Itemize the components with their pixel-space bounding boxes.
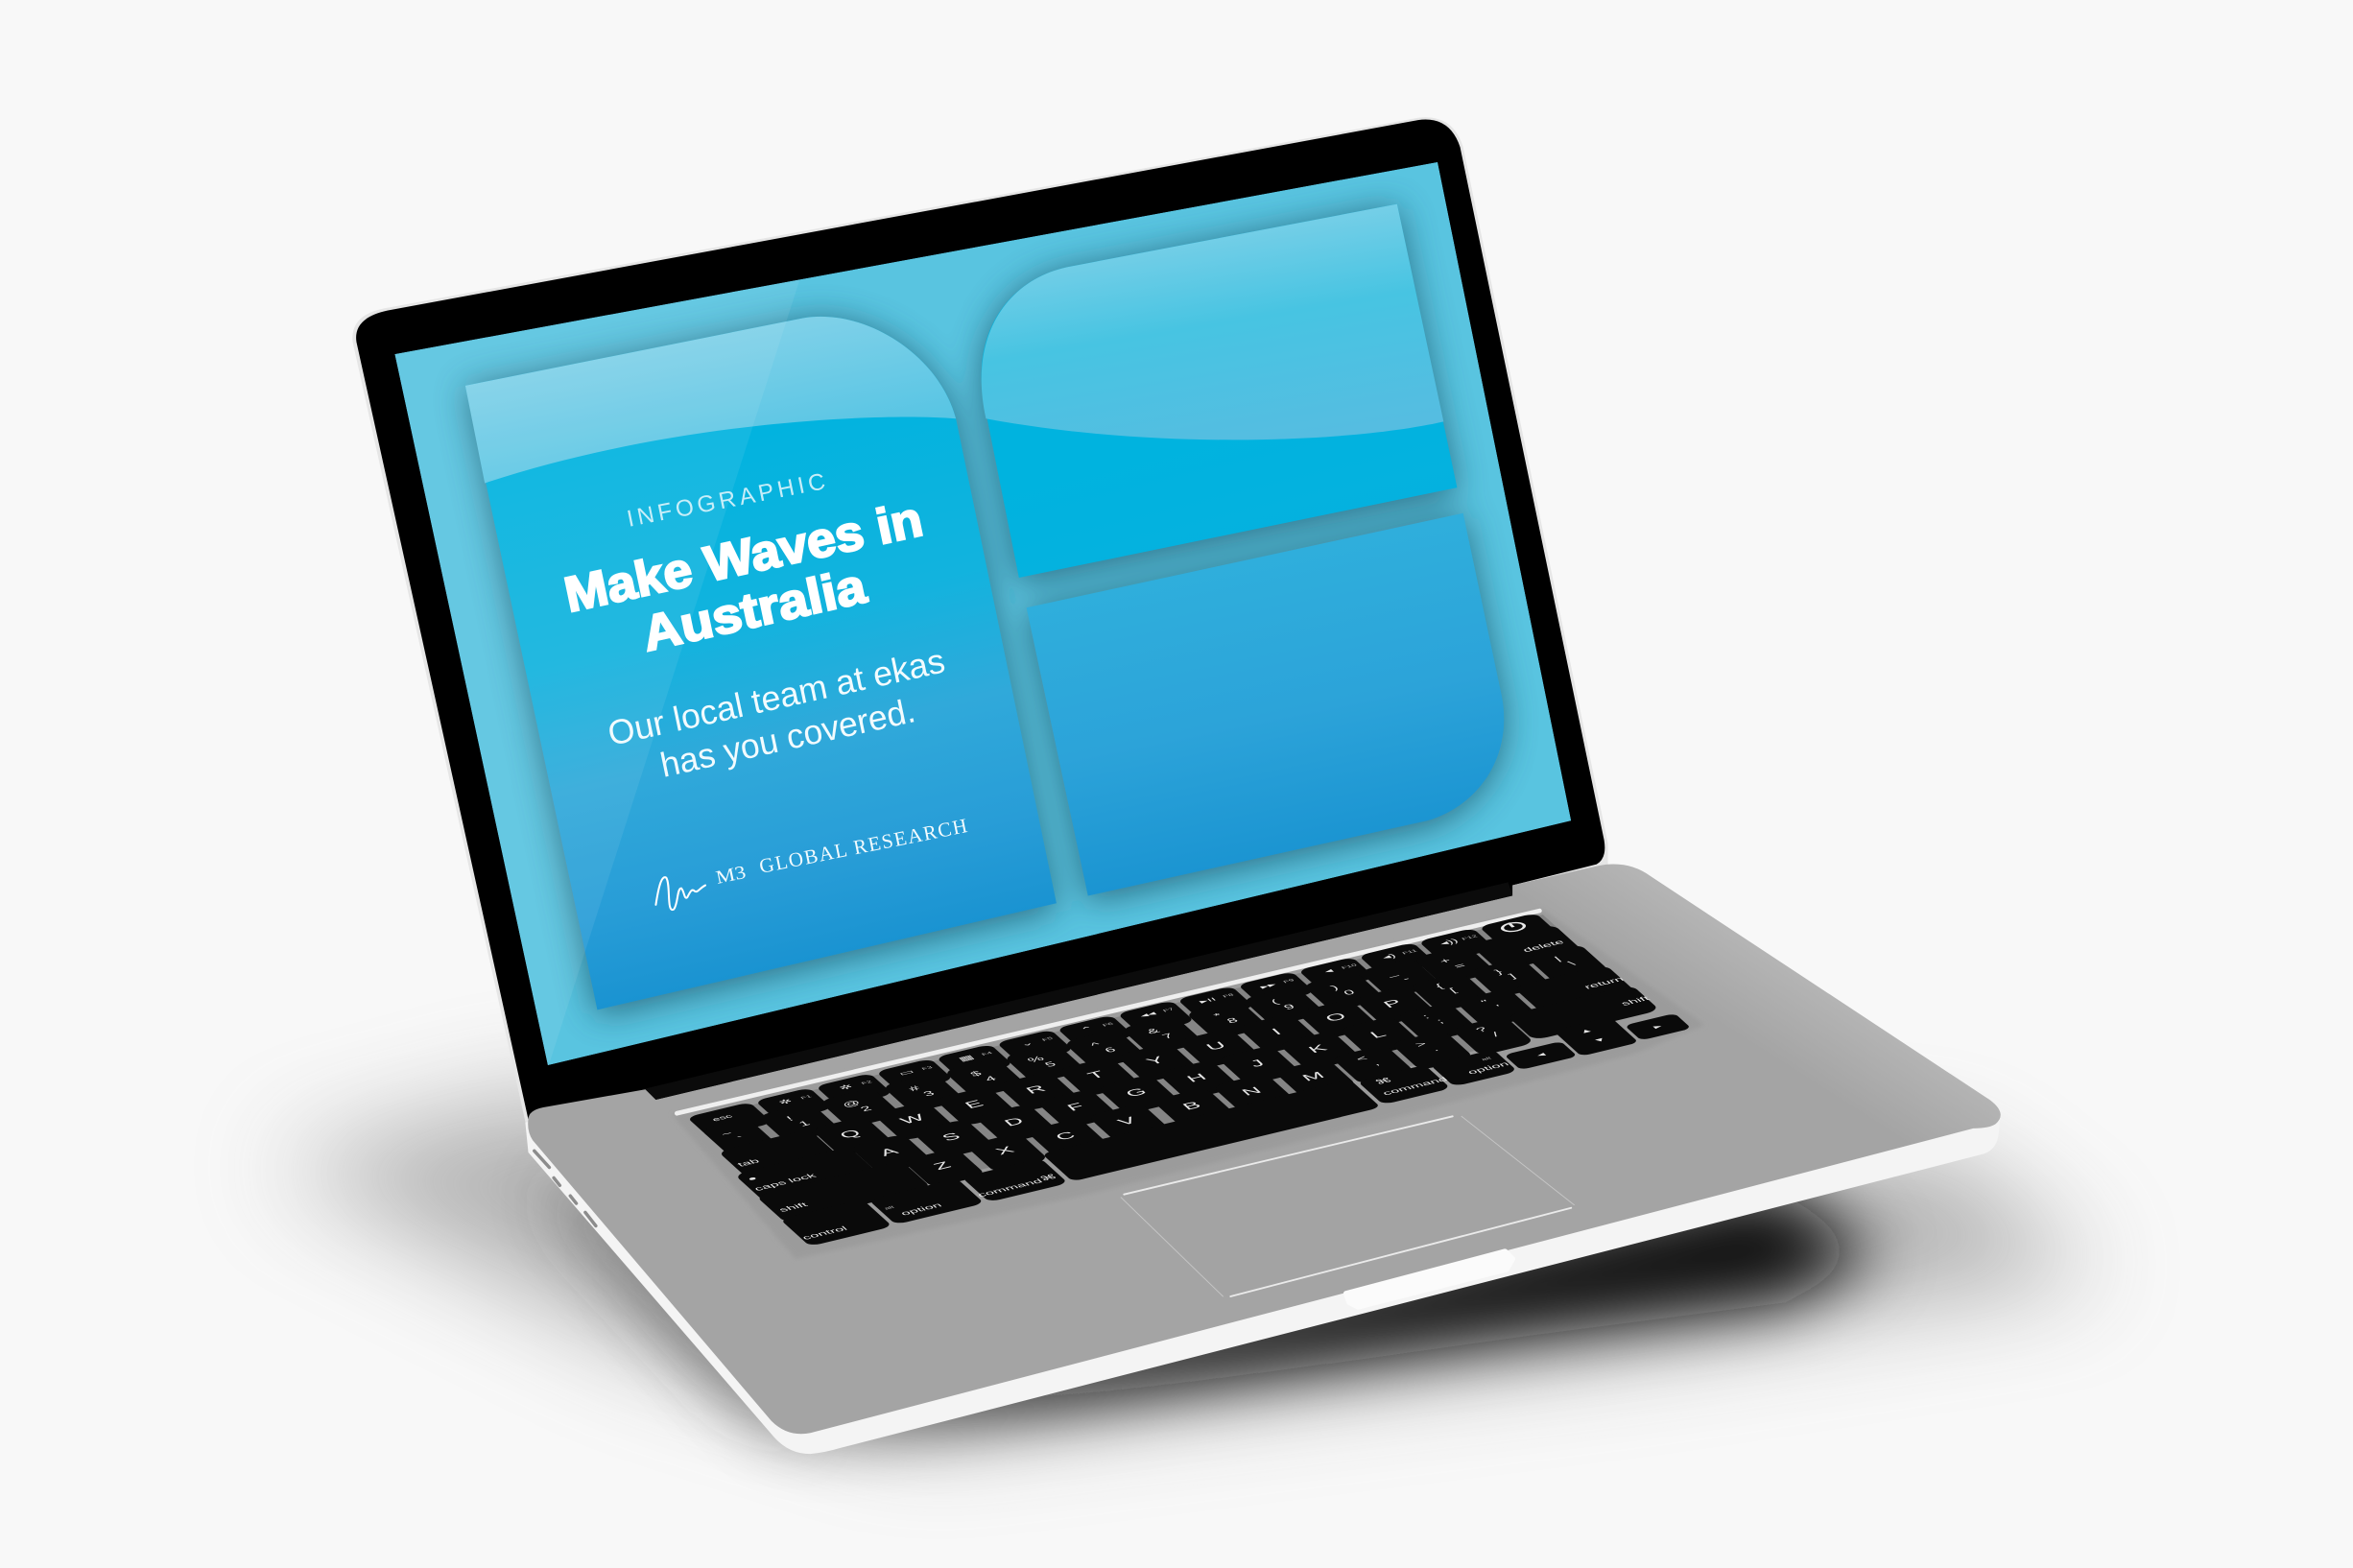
row: numbers: ^ [1088,1041,1104,1049]
row: numbers: 9 [1281,1003,1297,1011]
top right card wave sheen [982,204,1443,440]
front latch notch [1346,1251,1512,1307]
row: QWERTY: I [1269,1027,1285,1037]
logo: GLOBAL RESEARCH: GLOBAL RESEARCH [757,814,969,878]
row: modifiers and space bar: ⌘ [1372,1076,1394,1086]
panel: bottom right card [1027,513,1504,895]
row: function keys: F1 [799,1094,813,1100]
row: function keys: F12 [1461,935,1479,941]
title card body [465,317,1057,1010]
screen [394,162,1571,1068]
row: ASDF [734,964,1637,1201]
row: modifiers and space bar: option [898,1201,944,1217]
row: numbers: 6 [1103,1046,1119,1054]
row: function keys: ⌄ [1017,1039,1036,1048]
row: ZXCV: . [1430,1045,1440,1053]
row: function keys: F7 [1162,1008,1176,1012]
panel shadows [465,207,1504,1016]
lid silver edge [352,117,1608,1128]
row: modifiers and space bar: control [800,1224,849,1241]
row: numbers: 8 [1224,1016,1241,1025]
row: function keys: ▭ [896,1068,916,1077]
heading line 1: Make Waves in [559,490,927,623]
subheading line 1: Our local team at ekas [605,640,948,753]
logo: M3: M3 [714,863,748,889]
icon: M3 signature wave [655,877,705,910]
row: numbers: _ [1382,969,1400,978]
row: function keys: ◂)) [1438,938,1461,947]
row: modifiers and space bar: option [1465,1060,1510,1076]
row: numbers: ! [784,1115,796,1122]
row: modifiers and space bar: ▸ [1651,1023,1665,1031]
row: QWERTY: } [1492,968,1505,976]
row: numbers: 7 [1160,1032,1176,1040]
row: numbers: * [1211,1011,1225,1019]
row: ZXCV: , [1370,1059,1382,1067]
row: QWERTY: { [1433,983,1446,990]
row: numbers: % [1025,1055,1046,1064]
panel: title card [465,317,1057,1010]
row: numbers: = [1452,962,1468,970]
row: numbers: 5 [1042,1060,1058,1068]
row: ASDF: S [939,1130,963,1144]
row: ZXCV: shift [777,1201,810,1213]
lid black bezel [356,120,1604,1119]
screen glare streak [394,279,800,1068]
row: ASDF: ' [1494,1004,1505,1010]
row: ZXCV: X [992,1145,1018,1157]
row: QWERTY: Q [837,1128,865,1141]
hinge band [642,882,1512,1100]
row: ASDF: " [1479,998,1491,1006]
row: modifiers and space bar: alt [1480,1057,1492,1061]
keyboard [671,908,1697,1247]
row: ZXCV: Z [930,1159,955,1172]
side ports [535,1151,596,1225]
top right card body [982,204,1457,578]
row: numbers: 2 [858,1105,874,1113]
row: modifiers and space bar [777,1004,1697,1247]
trackpad [1121,1115,1576,1298]
keyboard well highlight [677,911,1539,1113]
row: numbers [701,924,1583,1156]
row: function keys: F2 [860,1080,873,1085]
row: function keys: esc [711,1113,734,1123]
row: function keys [687,913,1558,1138]
row: function keys: F5 [1041,1036,1055,1042]
row: QWERTY: | [1552,955,1563,962]
screen background [394,162,1571,1065]
row: function keys: ▸ıı [1197,995,1219,1005]
row: ZXCV: > [1413,1040,1429,1049]
row: modifiers and space bar: ▾ [1593,1035,1607,1044]
row: function keys: ◂ [1321,967,1337,975]
row: numbers: 3 [921,1089,938,1098]
row: ZXCV: N [1239,1085,1265,1098]
row: function keys: ✲ [837,1082,855,1091]
row: function keys: F11 [1401,949,1418,955]
row: ZXCV: < [1353,1055,1369,1063]
laptop mockup scene [274,117,2104,1491]
row: numbers: @ [840,1099,863,1108]
row: ASDF: G [1123,1086,1151,1100]
row: numbers: 1 [796,1119,812,1128]
row: ZXCV [755,985,1665,1224]
row: numbers: delete [1521,938,1566,954]
row: QWERTY: P [1380,997,1405,1010]
row: QWERTY: \ [1566,960,1578,967]
row: QWERTY: tab [735,1157,762,1168]
row: QWERTY: [ [1447,986,1459,994]
row: function keys: ▸▸ [1258,981,1279,990]
row: QWERTY: O [1322,1010,1350,1024]
row: numbers: ~ [719,1129,735,1138]
row: function keys: F8 [1222,993,1235,998]
row: QWERTY: Y [1143,1055,1169,1067]
row: ASDF: H [1183,1072,1210,1084]
row: function keys: ▦ [957,1054,976,1062]
row: ZXCV: B [1179,1100,1204,1112]
row: function keys: F10 [1341,963,1359,970]
row: ASDF: : [1420,1012,1432,1020]
row: modifiers and space bar: ▴ [1579,1027,1594,1034]
label: INFOGRAPHIC: INFOGRAPHIC [625,468,827,533]
icon: power [1499,920,1528,933]
row: QWERTY: U [1203,1039,1229,1053]
row: modifiers and space bar: command [1380,1076,1450,1097]
row: ASDF: L [1367,1029,1390,1040]
row: numbers: 0 [1342,988,1358,997]
row: numbers: & [1144,1027,1162,1035]
heading line 2: Australia [637,557,871,661]
row: ZXCV: shift [1619,995,1652,1007]
row: QWERTY: E [962,1098,987,1111]
row: function keys: ⌃ [1078,1025,1097,1033]
title card wave sheen [465,317,956,483]
row: QWERTY: W [897,1112,929,1127]
row: modifiers and space bar: command [975,1177,1044,1199]
subheading line 2: has you covered. [656,690,918,785]
laptop lid [352,117,1608,1128]
row: numbers: 4 [983,1075,999,1082]
row: modifiers and space bar: ◂ [1533,1051,1549,1058]
row: function keys: F6 [1102,1022,1115,1028]
row: modifiers and space bar: alt [883,1205,895,1210]
row: function keys: ✲ [776,1098,795,1106]
row: ASDF: K [1305,1042,1330,1056]
row: numbers: $ [968,1069,985,1078]
row: QWERTY: R [1023,1083,1049,1096]
base top deck [528,865,2001,1434]
row: numbers: + [1438,957,1454,965]
row: function keys: F9 [1282,978,1295,984]
keyboard floor [693,915,1648,1214]
row: QWERTY [718,944,1610,1178]
base white front edge [525,900,2000,1454]
row: numbers: ` [735,1135,748,1142]
row: ASDF: caps lock [752,1172,820,1192]
row: function keys: ◂) [1380,952,1398,961]
row: numbers: - [1400,975,1413,983]
row: ASDF: return [1582,976,1626,990]
row: ASDF: ; [1435,1017,1446,1025]
row: ZXCV: / [1490,1031,1502,1038]
row: numbers: # [906,1084,922,1093]
row: function keys: F3 [920,1065,934,1071]
keyboard well [673,910,1704,1259]
row: function keys: F4 [981,1051,994,1057]
row: ASDF: A [876,1146,902,1158]
row: function keys: ◂◂ [1137,1010,1159,1019]
row: ASDF: J [1247,1057,1268,1069]
laptop base [525,865,2001,1454]
row: ZXCV: ? [1474,1026,1489,1033]
row: ZXCV: M [1299,1070,1328,1083]
row: ASDF: D [1001,1115,1028,1128]
row: ZXCV: C [1053,1129,1079,1143]
row: ASDF: F [1064,1101,1088,1113]
row: numbers: ) [1328,984,1341,991]
row: QWERTY: ] [1507,972,1518,980]
row: QWERTY: T [1084,1069,1108,1081]
row: ZXCV: V [1114,1115,1140,1128]
panel: top right card [982,204,1457,578]
row: numbers: ( [1269,998,1281,1006]
row: modifiers and space bar: ⌘ [1037,1173,1059,1182]
